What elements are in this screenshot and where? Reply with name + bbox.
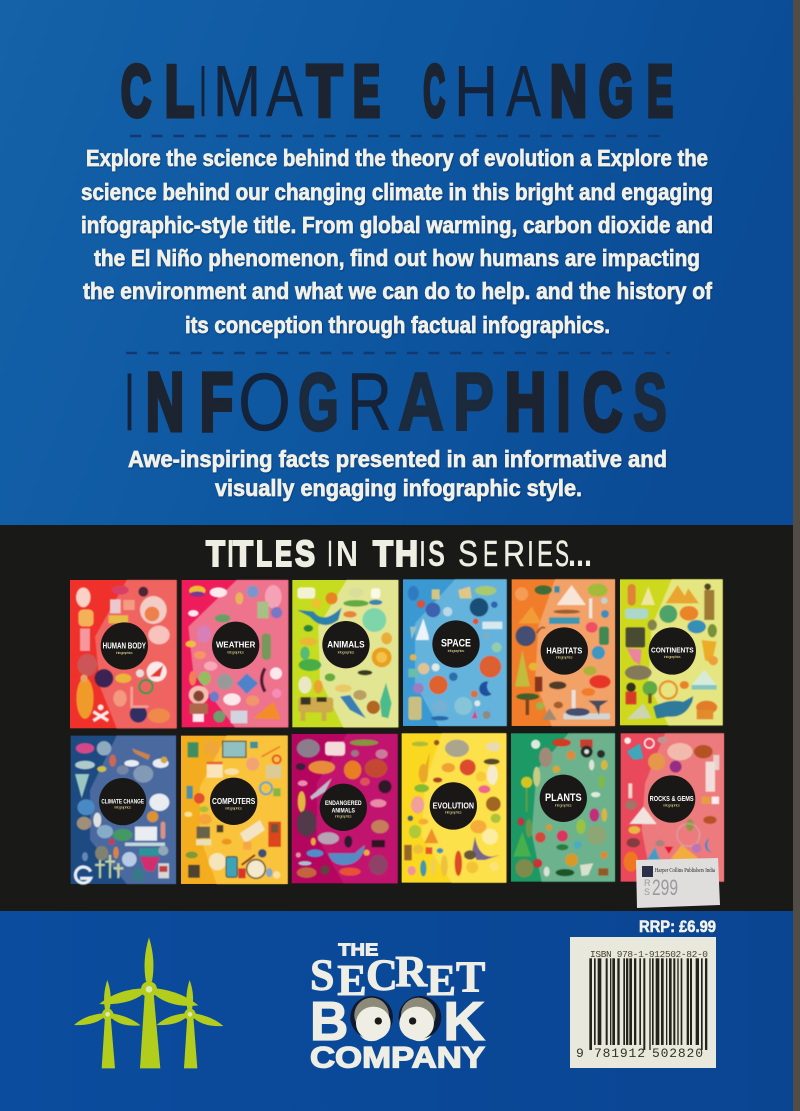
description paragraph: the environment and what we can do to help. and the history of [83, 278, 712, 304]
barcode: 502820 [652, 1046, 703, 1061]
cover: Habitats: infographics [556, 655, 573, 660]
title: Climate Change: M [213, 52, 261, 132]
heading: Infographics: I [557, 357, 570, 448]
publisher logo [310, 940, 485, 1075]
barcode: ISBN 978-1-912502-82-0 [590, 949, 708, 960]
heading: Titles in this series: T [233, 533, 253, 574]
heading: Titles in this series: T [373, 533, 393, 574]
heading: Titles in this series: I [420, 533, 425, 574]
heading: Titles in this series: E [275, 533, 292, 574]
cover: Endangered Animals [292, 734, 398, 883]
price sticker: Harper Collins Publishers India [655, 867, 715, 874]
cover: Weather [182, 580, 288, 727]
heading: Infographics: F [200, 357, 233, 448]
heading: Infographics: G [298, 357, 339, 448]
heading: Infographics: O [238, 357, 291, 448]
heading: Titles in this series: S [555, 533, 569, 574]
cover: Evolution: EVOLUTION [433, 801, 474, 811]
cover: Climate Change [71, 736, 176, 884]
tagline: Awe-inspiring facts presented in an informative and [128, 446, 667, 472]
black series band [0, 525, 793, 911]
barcode [570, 937, 716, 1068]
title: Climate Change: G [599, 52, 633, 132]
cover: Continents: infographics [664, 654, 681, 659]
cover: Space: SPACE [441, 638, 471, 650]
title: Climate Change: C [121, 52, 151, 132]
title: Climate Change: C [415, 52, 445, 132]
heading: Titles in this series: I [327, 533, 333, 574]
cover: Space: infographics [448, 648, 464, 653]
heading: Infographics: H [505, 357, 546, 448]
description paragraph: the El Niño phenomenon, find out how humans are impacting [94, 245, 700, 271]
heading: Titles in this series: H [395, 533, 418, 574]
heading: Infographics: S [633, 357, 667, 448]
tagline [128, 446, 667, 501]
publisher logo: THE [338, 940, 378, 960]
cover: Endangered Animals: infographics [335, 813, 352, 818]
cover: Climate Change: infographics [114, 805, 131, 810]
heading: Titles in this series: I [228, 533, 233, 574]
heading: Infographics: R [347, 357, 392, 448]
cover: Rocks & Gems: ROCKS & GEMS [650, 794, 694, 803]
heading: Titles in this series: E [483, 533, 498, 574]
heading: Titles in this series: S [458, 533, 478, 574]
title: Climate Change: N [550, 52, 587, 132]
publisher logo: K [443, 991, 485, 1052]
barcode: 781912 [594, 1046, 645, 1061]
price sticker [636, 858, 720, 908]
cover: Animals [292, 580, 398, 727]
cover: Continents [620, 579, 723, 725]
heading: Infographics: C [583, 357, 622, 448]
description paragraph: Explore the science behind the theory of evolution a Explore the [86, 145, 708, 171]
cover: Climate Change: CLIMATE CHANGE [101, 798, 144, 805]
heading: Titles in this series: T [206, 533, 225, 574]
cover: Plants: PLANTS [545, 792, 582, 804]
cover: Habitats [512, 579, 615, 726]
price sticker: 299 [652, 875, 678, 900]
price sticker: S [644, 887, 650, 897]
heading: Titles in this series: E [537, 533, 553, 574]
heading: Titles in this series: N [336, 533, 358, 574]
title: Climate Change: H [454, 52, 498, 132]
cover: Human Body: HUMAN BODY [103, 641, 147, 650]
heading: Titles in this series: ... [568, 533, 592, 574]
cover: Rocks & Gems [621, 733, 724, 882]
title: Climate Change: E [353, 52, 380, 132]
blue upper panel [0, 0, 793, 526]
heading: Titles in this series: S [295, 533, 315, 574]
cover: Evolution [402, 733, 506, 883]
RRP price: RRP: £6.99 [639, 918, 716, 936]
price sticker: R [644, 878, 651, 888]
title: Climate Change: T [307, 52, 342, 132]
cover: Human Body: infographics [116, 650, 133, 655]
cover: Rocks & Gems: infographics [663, 802, 680, 807]
title: Climate Change: E [647, 52, 673, 132]
heading: Infographics: I [124, 357, 135, 448]
heading: Titles in this series: I [528, 533, 533, 574]
heading: Titles in this series: R [503, 533, 525, 574]
cover: Space [403, 579, 507, 726]
cover: Endangered Animals: ANIMALS [332, 807, 355, 814]
description paragraph: science behind our changing climate in this bright and engaging [81, 179, 713, 205]
cover: Continents: CONTINENTS [651, 646, 694, 655]
cover: Computers: COMPUTERS [212, 796, 255, 806]
heading: Titles in this series: L [256, 533, 272, 574]
heading: Infographics: A [398, 357, 444, 448]
blue bottom band [0, 911, 793, 1111]
cover: Animals: infographics [338, 649, 354, 654]
heading: Infographics: N [146, 357, 184, 448]
cover: Evolution: infographics [445, 810, 462, 815]
cover: Weather: WEATHER [216, 640, 256, 650]
cover: Weather: infographics [227, 649, 244, 654]
wind turbines icon [74, 937, 223, 1068]
title: Climate Change: L [165, 52, 194, 132]
publisher logo: O [355, 991, 388, 1052]
cover: Plants: infographics [555, 802, 572, 807]
cover: Habitats: HABITATS [546, 645, 582, 655]
cover: Animals: ANIMALS [327, 639, 365, 649]
cover: Computers [181, 736, 288, 884]
title: Climate Change: A [506, 52, 541, 132]
description paragraph: its conception through factual infographics. [185, 312, 610, 338]
tagline: visually engaging infographic style. [215, 475, 582, 501]
cover: Endangered Animals: ENDANGERED [325, 800, 362, 807]
publisher logo: O [403, 991, 437, 1052]
description paragraph: infographic-style title. From global warming, carbon dioxide and [81, 212, 713, 238]
publisher logo: COMPANY [310, 1042, 485, 1075]
heading: Infographics: P [453, 357, 494, 448]
heading: Titles in this series: S [428, 533, 445, 574]
description paragraph [81, 145, 713, 338]
cover: Plants [511, 733, 615, 882]
cover: Human Body [70, 580, 177, 728]
title: Climate Change: I [199, 52, 207, 132]
publisher logo: SECRET [310, 947, 485, 1005]
publisher logo: B [310, 991, 348, 1052]
cover: Computers: infographics [225, 805, 242, 810]
title: Climate Change: A [266, 52, 303, 132]
barcode: 9 [576, 1046, 584, 1061]
